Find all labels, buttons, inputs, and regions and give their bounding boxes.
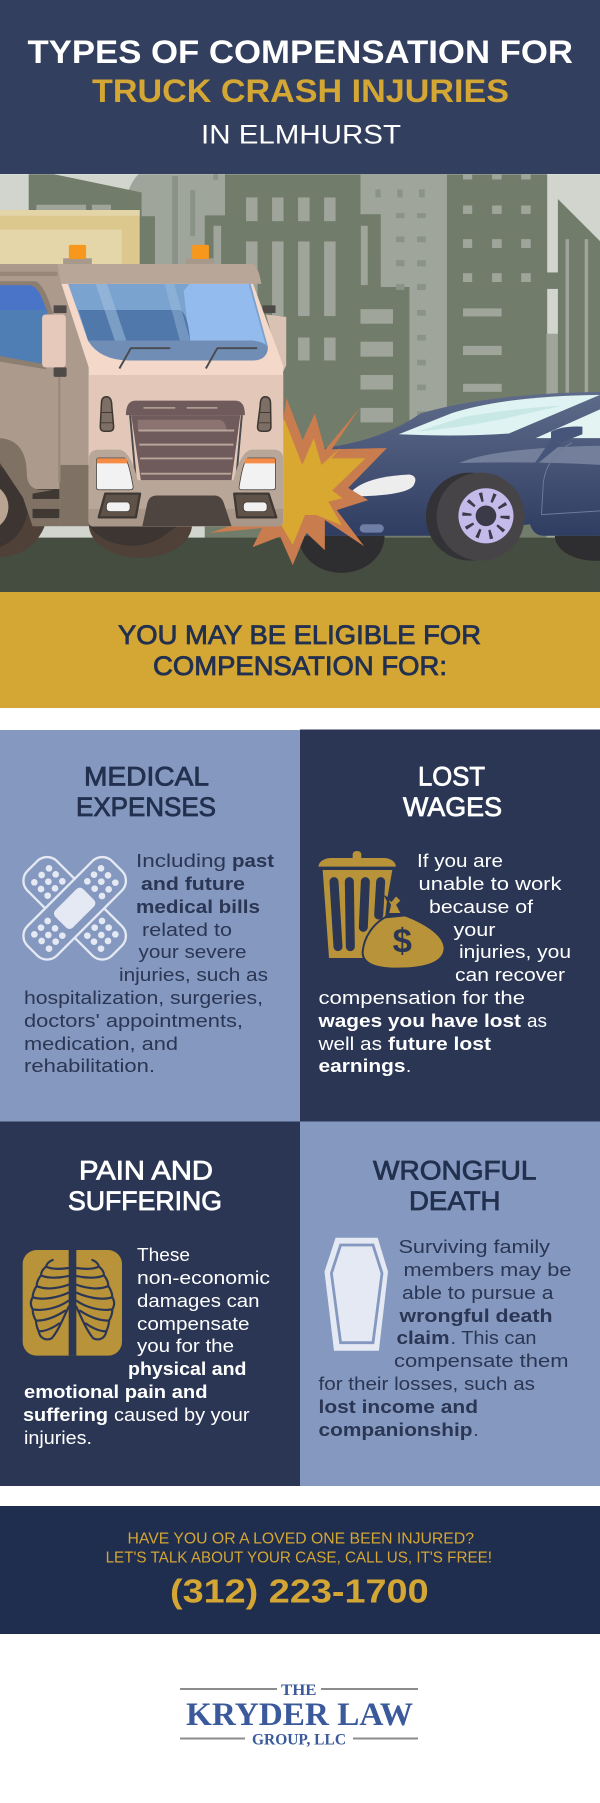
heading: lost wages bbox=[403, 762, 502, 822]
cab side bbox=[0, 268, 89, 526]
eligibility banner bbox=[0, 592, 600, 708]
truck bbox=[0, 210, 286, 558]
cab front bbox=[59, 277, 283, 527]
car bbox=[298, 392, 600, 573]
body text: wrongful death: wrongful death bbox=[398, 1305, 552, 1326]
body text: pain and suffering: These bbox=[137, 1244, 190, 1265]
body text: medical expenses: Including bbox=[136, 850, 226, 871]
icon: bandages bbox=[18, 851, 132, 965]
road bbox=[0, 538, 600, 593]
body text: lost wages bbox=[317, 850, 571, 1076]
body text: lost wages: wages you have lost bbox=[317, 1010, 521, 1031]
heading: medical expenses: EXPENSES bbox=[76, 792, 216, 822]
call to action panel bbox=[0, 1506, 600, 1634]
body text: lost wages: well as bbox=[317, 1033, 382, 1054]
body text: wrongful death: able to pursue a bbox=[402, 1282, 554, 1303]
body text: pain and suffering bbox=[23, 1244, 270, 1448]
crash burst bbox=[210, 398, 387, 565]
body text: pain and suffering: non-economic bbox=[137, 1267, 270, 1288]
fog lamps bbox=[99, 494, 276, 517]
heading: lost wages: WAGES bbox=[403, 792, 502, 822]
body text: wrongful death: Surviving family bbox=[398, 1236, 551, 1257]
heading: pain and suffering bbox=[68, 1156, 222, 1216]
subtitle: IN ELMHURST bbox=[201, 120, 401, 150]
air intake bbox=[142, 496, 232, 526]
body text: wrongful death: members may be bbox=[404, 1259, 572, 1280]
body text: lost wages: earnings bbox=[318, 1055, 406, 1076]
body text: medical expenses: doctors' appointments, bbox=[24, 1010, 243, 1031]
banner line 2: COMPENSATION FOR: bbox=[153, 651, 447, 681]
panel: lost wages bbox=[300, 730, 600, 1122]
header panel bbox=[0, 0, 600, 174]
body text: medical expenses: related to bbox=[142, 919, 232, 940]
body text: pain and suffering: you for the bbox=[137, 1335, 234, 1356]
body text: wrongful death: . bbox=[474, 1419, 479, 1440]
body text: wrongful death bbox=[318, 1236, 572, 1440]
right side panel bbox=[266, 315, 286, 373]
heading: pain and suffering: PAIN AND bbox=[79, 1156, 213, 1186]
icon: trash can and money bag: $ bbox=[393, 923, 412, 961]
body text: pain and suffering: damages can bbox=[137, 1290, 260, 1311]
icon: coffin bbox=[324, 1238, 388, 1351]
body text: medical expenses: medical bills bbox=[136, 896, 260, 917]
illustration: truck crashing into car in a city bbox=[0, 174, 600, 593]
body text: lost wages: your bbox=[454, 919, 496, 940]
body text: pain and suffering: caused by your bbox=[114, 1404, 250, 1425]
grille bbox=[126, 401, 245, 484]
body text: medical expenses: your severe bbox=[138, 941, 246, 962]
roof visor bbox=[54, 264, 261, 284]
logo: The Kryder Law Group, LLC bbox=[180, 1682, 418, 1748]
body text: medical expenses: medication, and bbox=[24, 1033, 178, 1054]
marker lamps bbox=[100, 397, 271, 431]
city background bbox=[0, 174, 600, 538]
banner line 1: YOU MAY BE ELIGIBLE FOR bbox=[118, 620, 481, 650]
body text: medical expenses: injuries, such as bbox=[119, 964, 268, 985]
body text: wrongful death: compensate them bbox=[394, 1350, 568, 1371]
headlights bbox=[96, 458, 276, 490]
wheels bbox=[89, 524, 192, 558]
call to action text: LET'S TALK ABOUT YOUR CASE, CALL US, IT'S FREE! bbox=[106, 1550, 492, 1566]
call to action text bbox=[106, 1530, 492, 1566]
heading: wrongful death: WRONGFUL bbox=[373, 1156, 536, 1186]
body text: pain and suffering: injuries. bbox=[24, 1427, 92, 1448]
panel: wrongful death bbox=[300, 1122, 600, 1486]
body text: medical expenses: rehabilitation. bbox=[24, 1055, 155, 1076]
body text: lost wages: . bbox=[406, 1055, 411, 1076]
body text: lost wages: injuries, you bbox=[459, 941, 571, 962]
body text: lost wages: compensation for the bbox=[318, 987, 525, 1008]
heading: medical expenses bbox=[76, 762, 216, 822]
phone number: (312) 223-1700 bbox=[170, 1573, 429, 1610]
title line 1: TYPES OF COMPENSATION FOR bbox=[28, 34, 573, 70]
body text: lost wages: If you are bbox=[417, 850, 503, 871]
logo: The Kryder Law Group, LLC: GROUP, LLC bbox=[252, 1731, 346, 1748]
icon: trash can and money bag bbox=[318, 851, 445, 969]
body text: wrongful death: for their losses, such as bbox=[318, 1373, 535, 1394]
side window bbox=[0, 280, 54, 369]
title line 2: TRUCK CRASH INJURIES bbox=[92, 73, 509, 109]
body text: medical expenses: past bbox=[232, 850, 274, 871]
body text: lost wages: can recover bbox=[455, 964, 565, 985]
body text: medical expenses bbox=[24, 850, 274, 1076]
logo: The Kryder Law Group, LLC: KRYDER LAW bbox=[186, 1697, 413, 1733]
roof lights bbox=[63, 245, 214, 264]
body text: wrongful death: companionship bbox=[318, 1419, 472, 1440]
heading: wrongful death bbox=[373, 1156, 536, 1216]
panel: medical expenses bbox=[0, 730, 300, 1122]
cargo box bbox=[0, 210, 140, 266]
logo: The Kryder Law Group, LLC: THE bbox=[281, 1682, 316, 1699]
mirror bbox=[42, 315, 66, 367]
body text: pain and suffering: compensate bbox=[137, 1313, 250, 1334]
body text: lost wages: future lost bbox=[388, 1033, 491, 1054]
body text: pain and suffering: physical and bbox=[128, 1358, 246, 1379]
bumper bbox=[89, 450, 283, 527]
icon: rib cage bbox=[23, 1250, 122, 1356]
body text: wrongful death: lost income and bbox=[318, 1396, 478, 1417]
body text: pain and suffering: emotional pain and bbox=[24, 1381, 208, 1402]
wipers bbox=[119, 348, 257, 368]
body text: pain and suffering: suffering bbox=[23, 1404, 108, 1425]
heading: medical expenses: MEDICAL bbox=[84, 762, 209, 792]
car front wheel bbox=[426, 473, 525, 561]
heading: lost wages: LOST bbox=[418, 762, 485, 792]
body text: lost wages: because of bbox=[429, 896, 534, 917]
windshield bbox=[68, 284, 268, 360]
body text: medical expenses: hospitalization, surgeries, bbox=[24, 987, 263, 1008]
panel: pain and suffering bbox=[0, 1122, 300, 1486]
body text: lost wages: as bbox=[527, 1010, 547, 1031]
body text: wrongful death: . This can bbox=[450, 1327, 536, 1348]
call to action text: HAVE YOU OR A LOVED ONE BEEN INJURED? bbox=[128, 1530, 474, 1548]
body text: medical expenses: and future bbox=[141, 873, 245, 894]
body text: lost wages: unable to work bbox=[418, 873, 562, 894]
body text: wrongful death: claim bbox=[396, 1327, 450, 1348]
heading: wrongful death: DEATH bbox=[409, 1186, 500, 1216]
heading: pain and suffering: SUFFERING bbox=[68, 1186, 222, 1216]
